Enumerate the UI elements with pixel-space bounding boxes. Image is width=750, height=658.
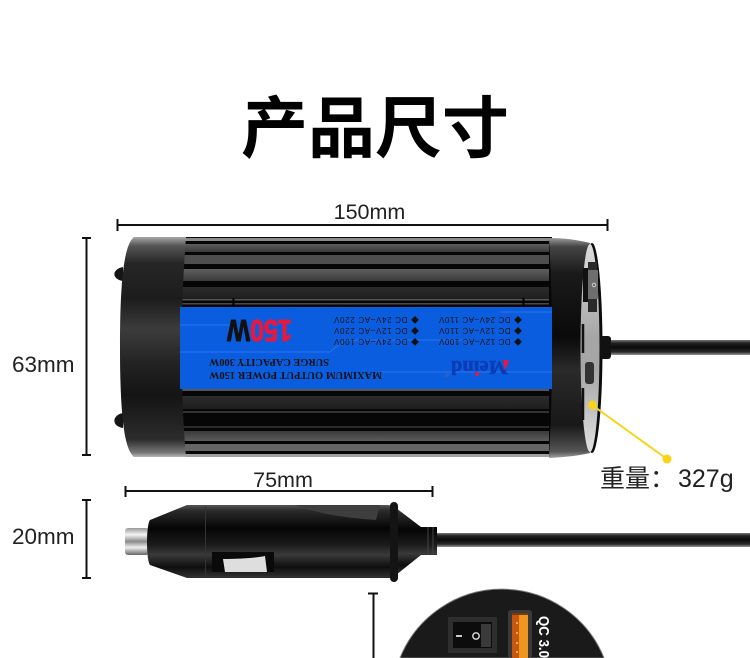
dimension: height 63mm	[12, 238, 91, 455]
rocker switch	[448, 617, 497, 653]
plug cable	[430, 533, 750, 547]
label ticks	[234, 298, 524, 309]
specs right column	[438, 315, 522, 346]
ribbed bottom	[181, 388, 552, 457]
ribbed top	[181, 237, 552, 308]
strain relief	[396, 508, 437, 575]
cable grommet	[600, 336, 611, 359]
capacity text: SURGE CAPACITY 300W	[209, 356, 329, 367]
USB port	[508, 610, 532, 658]
blue label	[180, 307, 552, 389]
left cap	[120, 237, 186, 457]
left feet	[114, 267, 123, 428]
specs left column: ◆ DC 24V–AC 100V	[333, 337, 419, 346]
brand logo: Meind	[451, 356, 508, 378]
specs left column: ◆ DC 24V–AC 220V	[333, 315, 419, 324]
specs right column: ◆ DC 12V–AC 110V	[438, 326, 522, 335]
capacity text: MAXIMUM OUTPUT POWER 150W	[209, 369, 382, 380]
top facet	[295, 505, 380, 520]
right cap	[549, 238, 600, 458]
dimension: plug length 75mm: 75mm	[253, 468, 313, 492]
dimension: bottom tick	[368, 593, 378, 658]
weight callout: 327g	[678, 465, 734, 493]
dimension: plug diameter 20mm	[12, 500, 91, 578]
inverter body	[114, 237, 611, 458]
inverter cable	[605, 340, 750, 355]
weight callout	[588, 400, 734, 493]
dimension: plug diameter 20mm: 20mm	[12, 524, 75, 549]
plug body	[147, 505, 393, 578]
power switch	[583, 262, 598, 312]
socket slots	[582, 324, 584, 420]
cigarette plug	[125, 502, 437, 582]
specs right column: ◆ DC 12V–AC 100V	[438, 337, 522, 346]
inverter end view	[400, 589, 604, 658]
capacity text	[209, 356, 382, 380]
circuit pattern	[180, 312, 552, 372]
wattage: 150	[250, 313, 292, 348]
flange	[390, 502, 398, 582]
specs left column: ◆ DC 12V–AC 220V	[333, 326, 419, 335]
title: 产品尺寸	[241, 92, 509, 167]
metal tip	[125, 528, 149, 555]
dimension: width 150mm	[117, 200, 608, 231]
dimension: width 150mm: 150mm	[334, 200, 405, 224]
wattage: W	[226, 313, 250, 348]
specs right column: ◆ DC 24V–AC 110V	[438, 315, 522, 324]
dimension: height 63mm: 63mm	[12, 352, 75, 377]
weight callout: 重量：	[600, 465, 675, 493]
side clip	[212, 552, 274, 572]
dimension: plug length 75mm	[125, 468, 433, 497]
end face	[582, 243, 602, 453]
specs left column	[333, 315, 419, 346]
